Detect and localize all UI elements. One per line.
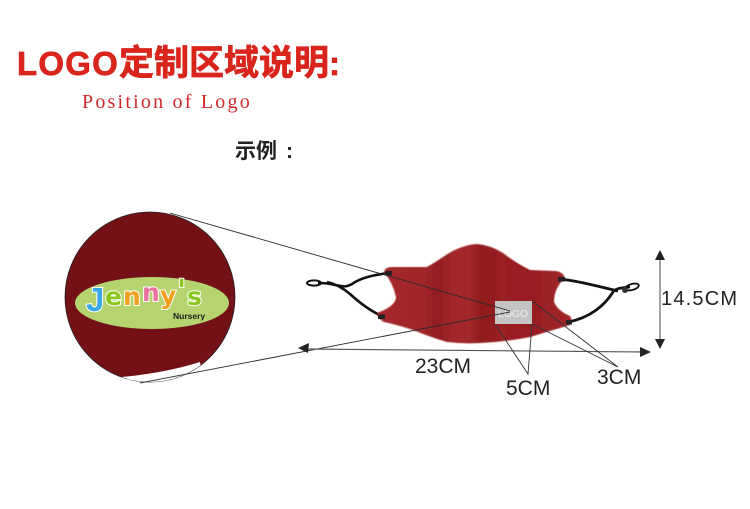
logo text: Jenny's: y — [160, 281, 176, 310]
dimension labels — [415, 288, 737, 400]
logo ellipse — [75, 277, 229, 329]
height arrow — [655, 250, 665, 349]
strap clips — [385, 271, 392, 276]
label: 3CM: 3CM — [597, 366, 641, 389]
logo text: Nursery: Nursery — [173, 311, 205, 321]
logo text: Jenny's: n — [142, 278, 160, 307]
logo placement box — [495, 301, 532, 324]
title: 定制区域说明 — [119, 44, 329, 83]
label: 23CM: 23CM — [415, 355, 471, 378]
logo placement box: LOGO — [498, 308, 528, 320]
logo text: Jenny's: e — [105, 282, 122, 311]
infographic canvas — [18, 44, 736, 395]
example heading: : — [286, 140, 293, 163]
logo text: Jenny's: s — [187, 282, 202, 311]
title: LOGO — [17, 45, 119, 82]
5CM leader lines — [495, 324, 532, 374]
callout lines from circle to logo — [140, 213, 510, 383]
example heading: 示例 — [235, 140, 277, 163]
mask — [307, 244, 640, 343]
mask body — [377, 244, 572, 343]
label: 5CM: 5CM — [506, 377, 550, 400]
width arrow — [298, 343, 651, 357]
3CM leader lines — [532, 301, 618, 367]
logo text: Jenny's: ' — [177, 274, 186, 309]
logo text: Jenny's: n — [123, 282, 141, 311]
ear strap right — [560, 279, 630, 322]
label: 14.5CM: 14.5CM — [661, 288, 737, 310]
zoomed logo circle — [65, 212, 235, 392]
subtitle: Position of Logo — [82, 91, 251, 113]
logo text: Jenny's: J — [86, 281, 104, 318]
logo text: Jenny's — [86, 274, 202, 318]
white fabric edge — [122, 362, 200, 382]
title: : — [329, 45, 340, 82]
ear strap left — [318, 273, 388, 317]
